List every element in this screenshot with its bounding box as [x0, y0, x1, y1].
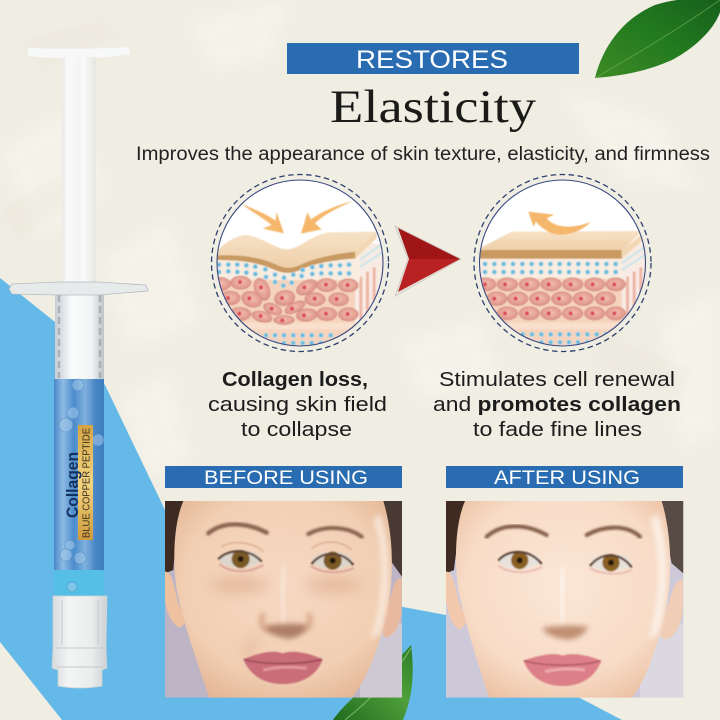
label: Collagen: Collagen	[63, 452, 82, 518]
skin cells	[211, 276, 358, 325]
banner: before using	[165, 466, 402, 489]
title: Elasticity: Elasticity	[330, 81, 537, 133]
heading banner: RESTORES	[287, 43, 579, 74]
inward arrows	[242, 201, 353, 234]
brows	[487, 526, 640, 537]
top skin surface	[213, 232, 377, 268]
diagram: collagen loss skin	[211, 174, 388, 352]
syringe product	[9, 47, 148, 688]
skin cells	[475, 278, 626, 320]
brows	[208, 524, 362, 537]
face	[456, 501, 670, 700]
plunger rod	[62, 57, 96, 283]
photo: after using face	[446, 501, 683, 700]
molecule bubbles	[59, 379, 104, 592]
arrow: red transition	[395, 226, 461, 296]
flat skin surface	[477, 231, 643, 250]
label: Blue Copper Peptide: BLUE COPPER PEPTIDE	[82, 428, 92, 538]
diagram: renewed skin	[474, 174, 652, 352]
caption: collagen loss: Collagen loss,	[222, 369, 368, 391]
hair	[165, 501, 184, 572]
banner: after using: AFTER USING	[494, 467, 640, 489]
hair	[446, 501, 465, 572]
caption: stimulates renewal: Stimulates cell renewal	[439, 369, 675, 391]
banner: after using	[446, 466, 683, 489]
pale background under band	[218, 258, 360, 280]
caption: stimulates renewal: and promotes collagen	[433, 394, 681, 416]
eyes	[498, 552, 632, 574]
water dots	[216, 262, 352, 346]
photo: before using face	[165, 501, 402, 700]
ears	[446, 572, 466, 629]
leaf: top right	[595, 0, 720, 78]
caption: collagen loss: causing skin field	[208, 394, 387, 416]
inner layers	[222, 280, 356, 346]
liquid chamber	[54, 379, 104, 595]
nozzle cap	[52, 596, 107, 688]
water dots	[482, 261, 618, 345]
gold label	[78, 425, 93, 540]
nose	[542, 626, 588, 640]
plunger cap	[28, 47, 130, 58]
lips	[243, 652, 323, 684]
barrel	[55, 292, 104, 382]
upward curved arrow	[528, 212, 591, 235]
leaf: bottom	[333, 645, 413, 720]
caption: collagen loss	[208, 369, 387, 441]
subtitle: Improves the appearance of skin texture, elasticity, and firmness	[136, 144, 710, 165]
lips	[523, 654, 601, 686]
ears	[165, 572, 185, 627]
nose	[262, 613, 310, 639]
caption: stimulates renewal: to fade fine lines	[473, 419, 642, 441]
caption: stimulates renewal	[433, 369, 681, 441]
face	[174, 501, 392, 700]
shadows	[210, 578, 362, 663]
blue background shape	[0, 278, 622, 720]
finger flange	[9, 282, 148, 295]
eyes	[218, 542, 354, 572]
banner: before using: BEFORE USING	[204, 467, 368, 489]
heading banner: RESTORES: RESTORES	[356, 46, 508, 74]
caption: collagen loss: to collapse	[241, 419, 352, 441]
